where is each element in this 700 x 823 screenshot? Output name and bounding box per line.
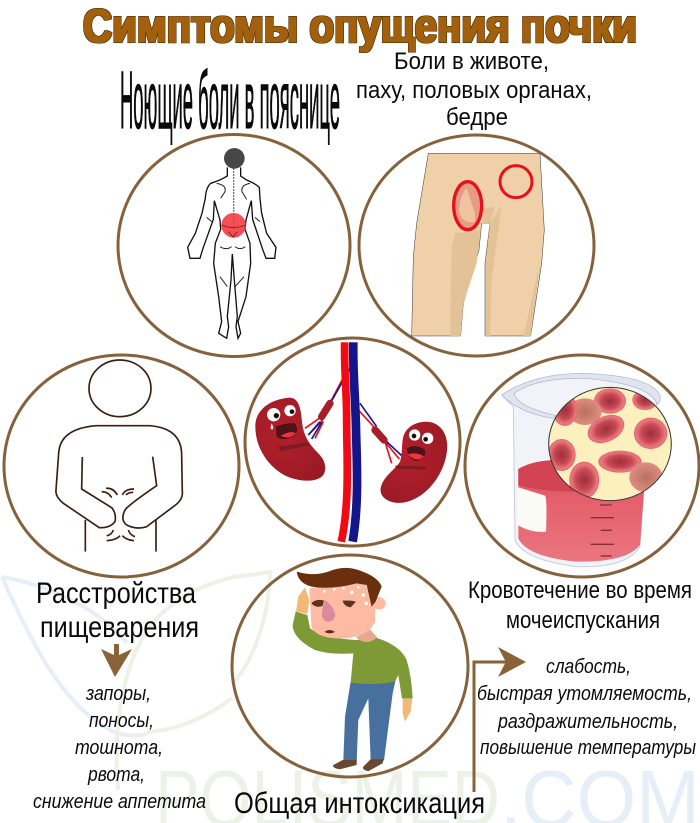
arrow: down to digestive symptoms — [101, 644, 132, 677]
heading: abdominal and groin pain: паху, половых органах, — [356, 77, 592, 104]
list: digestive symptoms: рвота, — [87, 764, 145, 786]
icon: face — [309, 580, 375, 639]
icon: right kidney — [381, 422, 447, 503]
icon: neck — [356, 629, 377, 642]
list: intoxication symptoms — [477, 656, 696, 759]
list: intoxication symptoms: слабость, — [546, 656, 631, 678]
label: digestive disorders — [36, 577, 199, 644]
label: digestive disorders: Расстройства — [36, 577, 196, 610]
label: bleeding during urination — [468, 577, 692, 634]
icon: sweat drops — [323, 586, 368, 605]
heading: abdominal and groin pain — [356, 48, 592, 131]
icon: left kidney — [255, 398, 325, 481]
icon: hand — [296, 587, 412, 722]
panel: kidneys — [245, 338, 460, 546]
panel: beaker with blood cells — [465, 355, 699, 577]
label: bleeding during urination: мочеиспускания — [506, 607, 660, 634]
panel: thighs with pain areas — [359, 135, 594, 356]
list: digestive symptoms — [33, 683, 206, 813]
icon: sweater — [293, 612, 413, 698]
list: digestive symptoms: запоры, — [85, 683, 151, 705]
list: digestive symptoms: снижение аппетита — [33, 791, 206, 813]
panel: person with fever — [232, 555, 468, 777]
heading: abdominal and groin pain: бедре — [446, 104, 508, 131]
label: digestive disorders: пищеварения — [40, 611, 199, 644]
list: digestive symptoms: поносы, — [89, 710, 154, 732]
arrow: intoxication to symptoms — [472, 647, 526, 792]
panel: back figure — [118, 134, 350, 356]
list: intoxication symptoms: раздражительность, — [497, 711, 678, 733]
panel: person holding stomach — [4, 355, 239, 577]
heading: abdominal and groin pain: Боли в животе, — [394, 48, 549, 75]
watermark — [2, 572, 700, 823]
list: digestive symptoms: тошнота, — [75, 737, 163, 759]
icon: hair — [297, 568, 382, 607]
label: general intoxication: Общая интоксикация — [234, 787, 485, 820]
icon: legs — [343, 680, 396, 762]
